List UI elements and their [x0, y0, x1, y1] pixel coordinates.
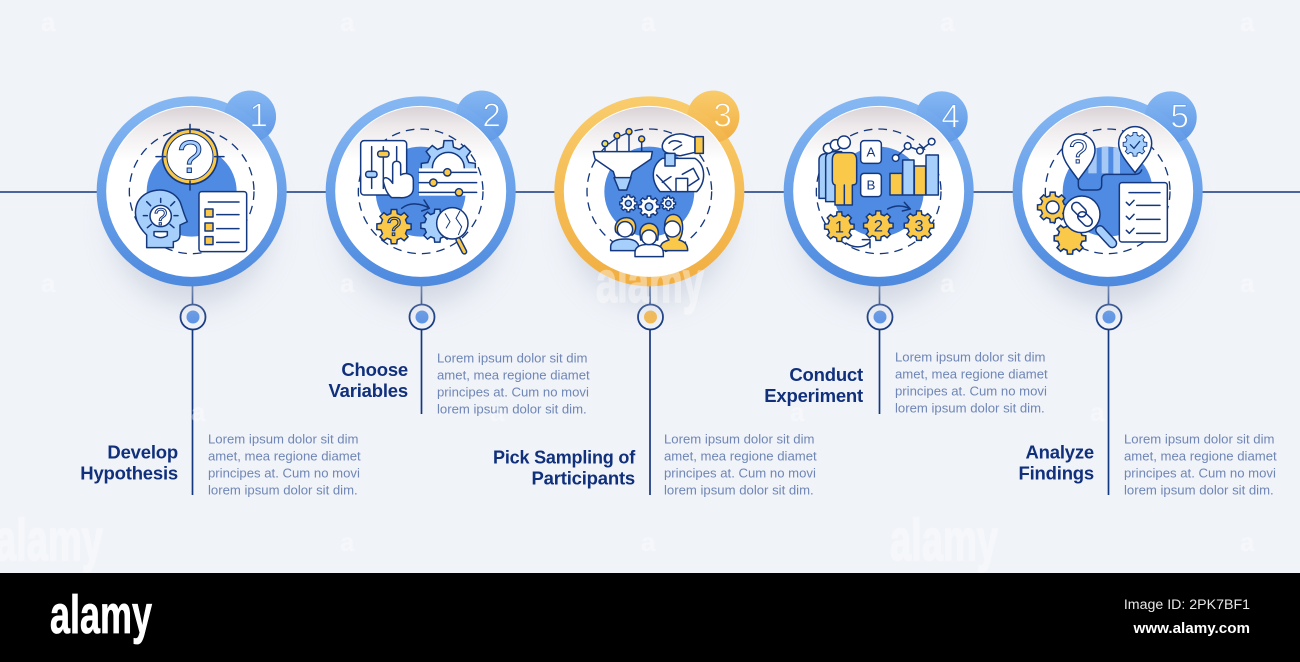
icon: checklist [199, 192, 247, 252]
text block 1: principes at. Cum no movi [208, 466, 360, 480]
text block 4: lorem ipsum dolor sit dim. [895, 400, 1045, 416]
connector [1078, 170, 1142, 190]
circle icon 4 [784, 91, 974, 305]
text block 5: Lorem ipsum dolor sit dim [1124, 432, 1274, 446]
icon: test participants [819, 136, 857, 205]
image id: Image ID: 2PK7BF1 [1124, 597, 1250, 613]
watermarks: a [1240, 7, 1255, 37]
bar chart [890, 138, 938, 195]
watermarks: a [940, 7, 955, 37]
circle icon 3: 3 [713, 98, 732, 135]
circle icon 4: 4 [941, 98, 960, 135]
text block 5 [1124, 432, 1277, 498]
heading 2 [329, 359, 408, 401]
text block 5: principes at. Cum no movi [1124, 466, 1276, 480]
stem and node 4 [868, 280, 892, 414]
circle icon 5 [1013, 91, 1203, 305]
watermarks: a [1240, 268, 1255, 298]
arrow [402, 200, 429, 211]
icon: yellow gears [1038, 192, 1086, 254]
text block 1: lorem ipsum dolor sit dim. [208, 482, 358, 498]
text block 3 [664, 432, 817, 498]
heading 4: Experiment [764, 385, 863, 406]
text block 4 [895, 350, 1048, 416]
text block 3: principes at. Cum no movi [664, 466, 816, 480]
step 3 [493, 91, 817, 497]
icon: numbered gears: 3 [914, 217, 924, 236]
text block 1 [208, 432, 361, 498]
text block 1: amet, mea regione diamet [208, 448, 361, 464]
icon: numbered gears [825, 211, 934, 241]
watermarks: a [41, 7, 56, 37]
heading 1: Hypothesis [80, 462, 178, 484]
circle icon 2: 2 [482, 98, 501, 135]
timeline [0, 191, 1300, 193]
stem and node 5 [1096, 280, 1122, 495]
heading 5: Analyze [1025, 442, 1094, 462]
text block 3: amet, mea regione diamet [664, 448, 817, 464]
icon: numbered gears: 1 [835, 218, 844, 237]
heading 1 [80, 442, 178, 484]
watermarks: a [191, 397, 206, 427]
icon: A B cards: B [867, 178, 876, 193]
watermarks: a [790, 397, 805, 427]
stem and node 2 [410, 280, 434, 414]
icon: sliders with hand [361, 141, 413, 198]
icon: participants [611, 214, 688, 257]
icon: A B cards: A [867, 145, 876, 160]
arrows [846, 202, 910, 248]
text block 2 [437, 350, 590, 416]
step 1 [80, 91, 361, 497]
watermarks: a [340, 7, 355, 37]
text block 2: amet, mea regione diamet [437, 368, 590, 382]
stem and node 3 [638, 280, 663, 495]
icon: magnifier and gear [421, 208, 468, 252]
watermarks: a [641, 527, 656, 557]
watermarks: a [641, 7, 656, 37]
icon: question pin: ? [1069, 134, 1088, 171]
icon: check pin [1119, 127, 1152, 173]
text block 4: Lorem ipsum dolor sit dim [895, 350, 1045, 364]
circle icon 1 [97, 91, 287, 305]
watermarks: a [490, 397, 505, 427]
icon: magnifier with link [1063, 196, 1112, 243]
icon: question gear: ? [387, 212, 401, 242]
heading 3: Participants [532, 468, 635, 488]
stem and node 1 [180, 280, 206, 495]
text block 2: lorem ipsum dolor sit dim. [437, 402, 587, 416]
watermarks: alamy [890, 508, 998, 573]
watermarks: a [340, 268, 355, 298]
heading 2: Choose [341, 359, 408, 380]
text block 5: amet, mea regione diamet [1124, 448, 1277, 464]
site url: www.alamy.com [1133, 620, 1250, 637]
watermarks: alamy [596, 250, 704, 315]
watermarks: a [1240, 527, 1255, 557]
footer bar [0, 573, 1300, 662]
icon: checklist [1119, 183, 1167, 242]
text block 3: Lorem ipsum dolor sit dim [664, 432, 814, 446]
step 4 [764, 91, 1048, 416]
step 2 [326, 91, 590, 416]
icon: head with bulb [135, 190, 187, 248]
text block 1: Lorem ipsum dolor sit dim [208, 432, 358, 446]
watermarks: a [940, 268, 955, 298]
icon: funnel [593, 129, 652, 190]
icon: A B cards [861, 141, 881, 197]
watermarks: a [1090, 397, 1105, 427]
icon: target question: ? [177, 132, 203, 183]
icon: head with bulb: ? [154, 204, 167, 231]
icon: gear with sliders [419, 141, 477, 196]
icon: question gear [377, 210, 411, 244]
heading 4 [764, 364, 863, 406]
icon: question pin [1062, 134, 1095, 180]
text block 4: amet, mea regione diamet [895, 366, 1048, 382]
text block 2: Lorem ipsum dolor sit dim [437, 350, 587, 366]
icon: gears [620, 195, 676, 217]
circle icon 5: 5 [1170, 98, 1189, 135]
watermarks: a [340, 527, 355, 557]
text block 4: principes at. Cum no movi [895, 384, 1047, 398]
icon: target question [156, 124, 224, 190]
heading 4: Conduct [789, 364, 863, 385]
text block 5: lorem ipsum dolor sit dim. [1124, 482, 1274, 498]
heading 3 [493, 446, 636, 488]
watermarks: a [41, 268, 56, 298]
text block 2: principes at. Cum no movi [437, 384, 589, 400]
circle icon 3 [554, 91, 744, 305]
icon: numbered gears: 2 [874, 217, 883, 236]
heading 5: Findings [1019, 462, 1094, 484]
heading 2: Variables [329, 380, 408, 401]
heading 3: Pick Sampling of [493, 446, 636, 468]
circle icon 2 [326, 91, 516, 305]
icon: hand sampling sphere [653, 134, 704, 192]
footer logo: alamy [50, 585, 152, 645]
text block 3: lorem ipsum dolor sit dim. [664, 482, 814, 498]
heading 1: Develop [107, 442, 178, 462]
circle icon 1: 1 [249, 98, 268, 135]
heading 5 [1019, 442, 1094, 484]
step 5 [1013, 91, 1277, 498]
